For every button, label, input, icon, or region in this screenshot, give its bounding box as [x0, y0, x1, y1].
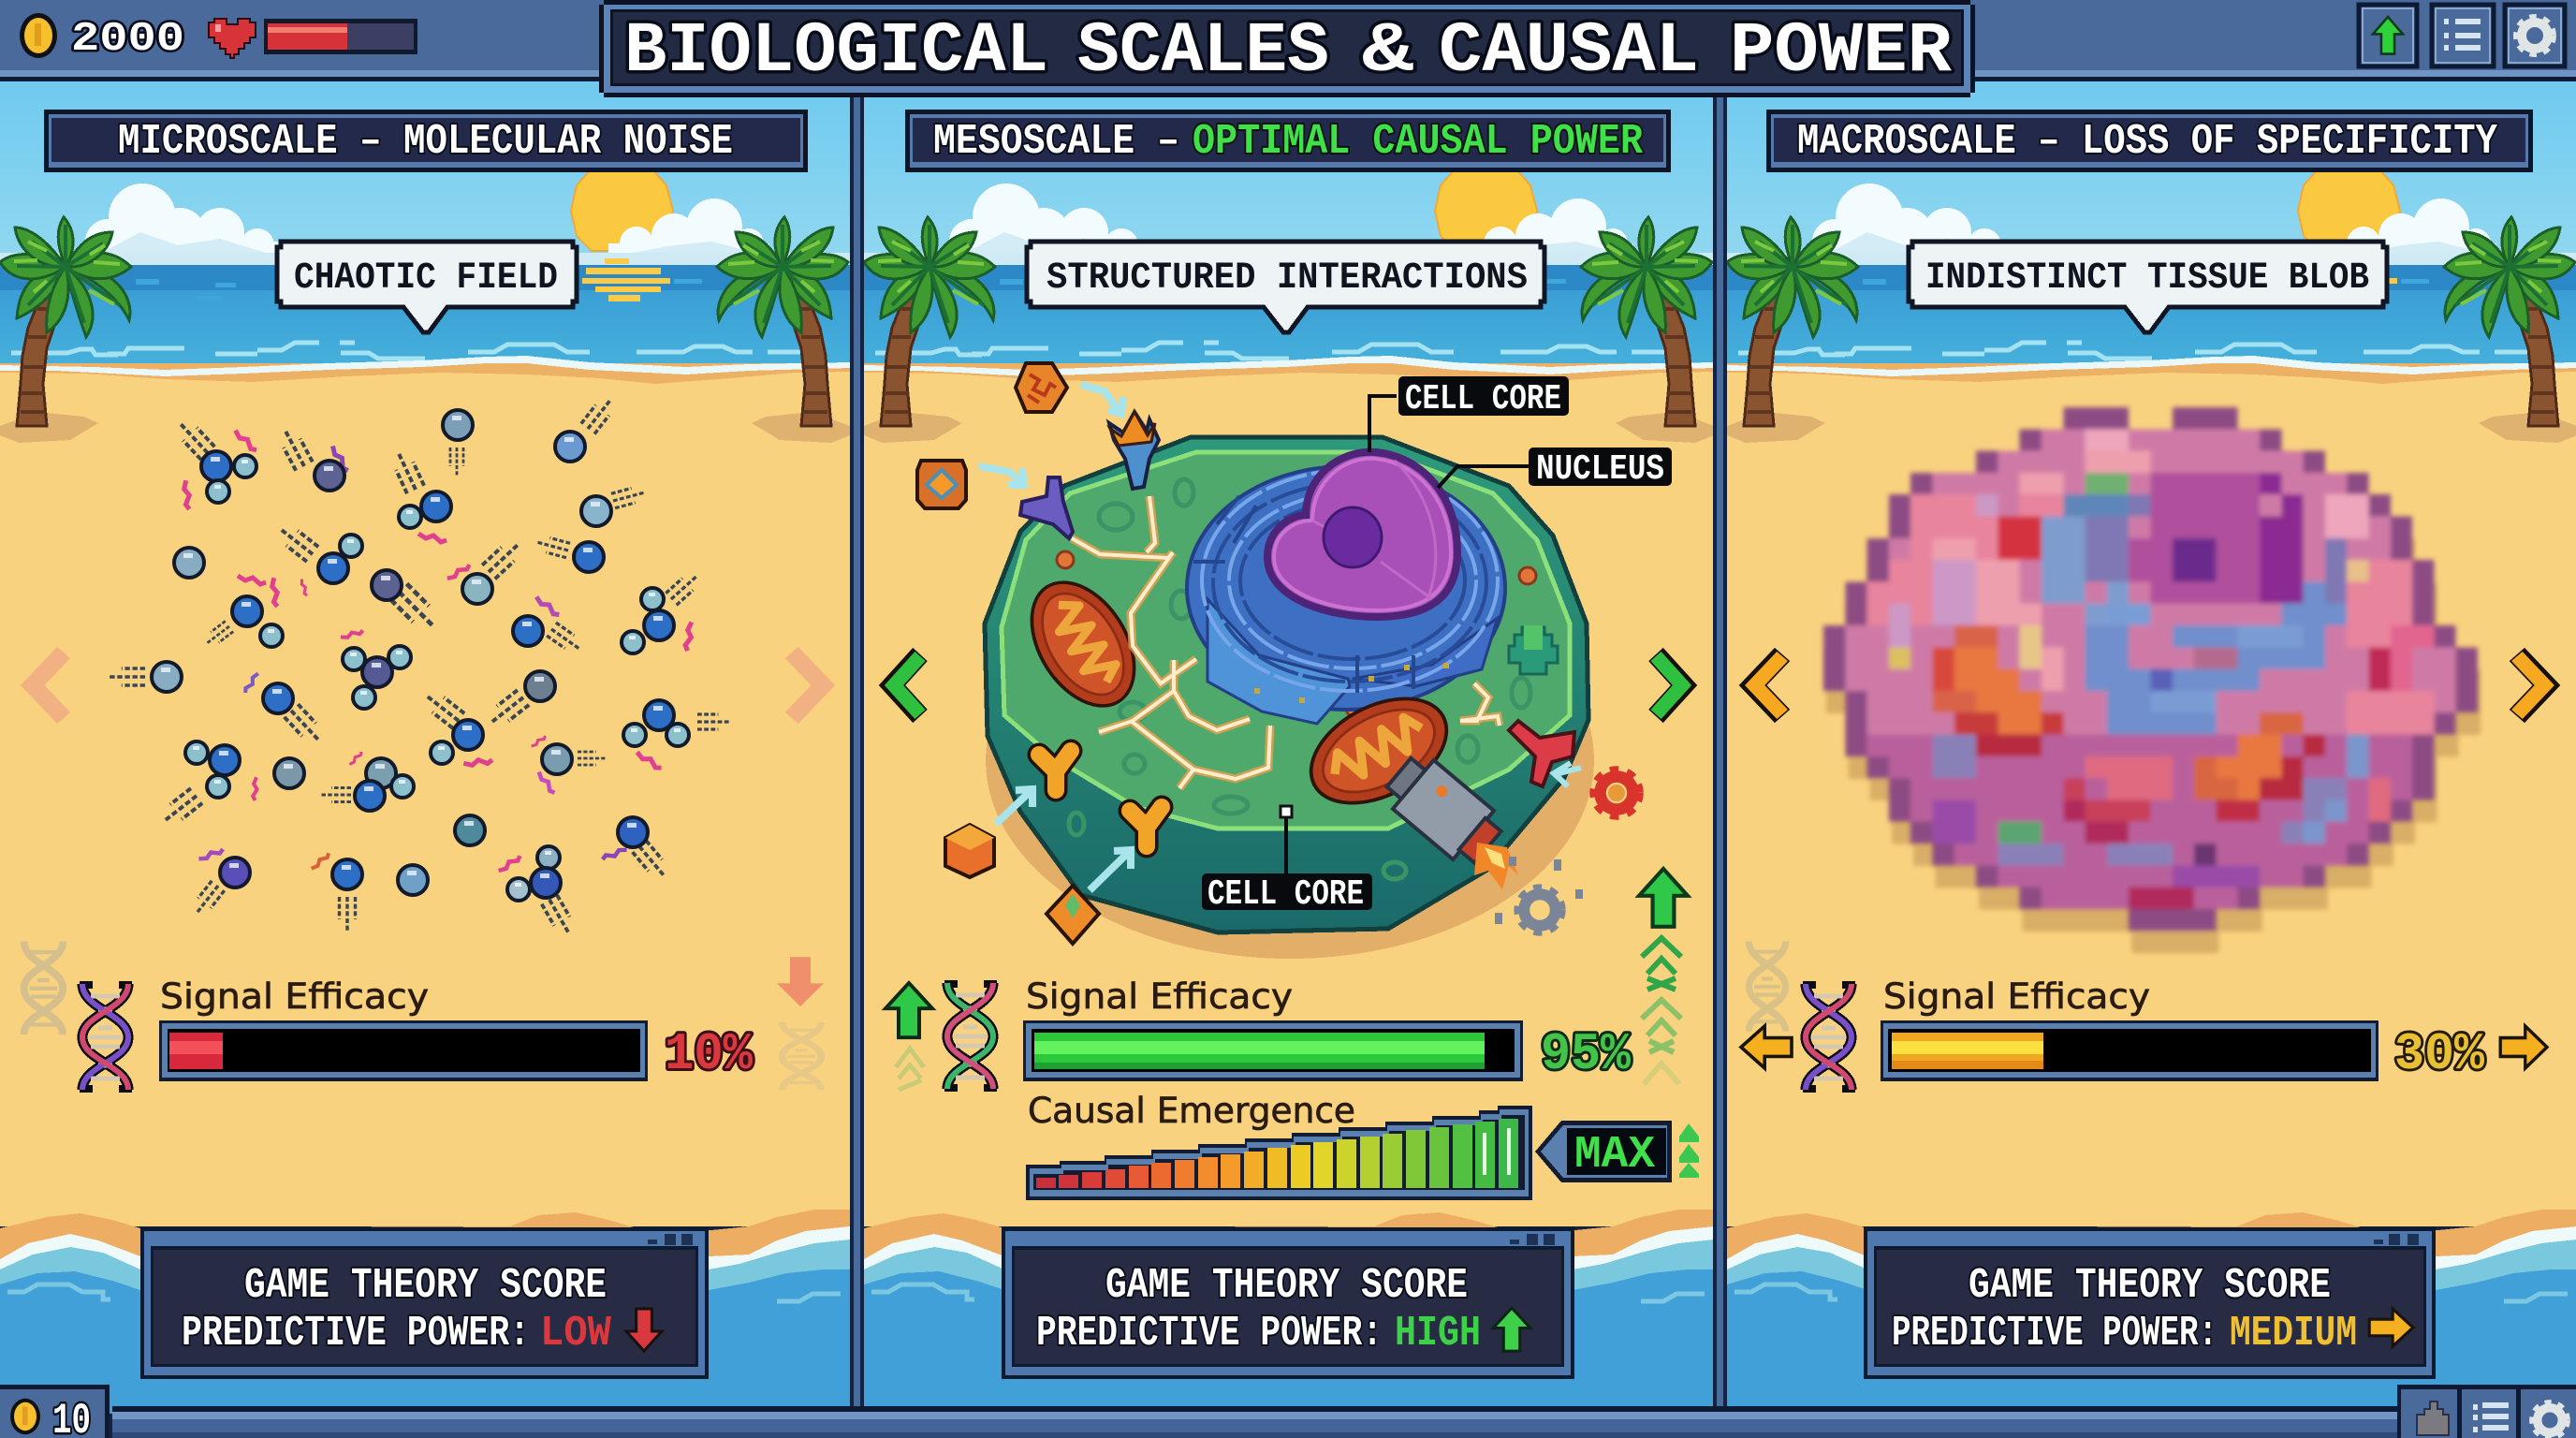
label: causal emergence: Causal Emergence [1028, 1091, 1355, 1131]
speech bubble: chaotic field [277, 242, 577, 332]
game theory score window: PREDICTIVE POWER: [1892, 1310, 2217, 1357]
speech bubble: structured interactions: STRUCTURED INTERACTIONS [1046, 257, 1528, 300]
cell shadow [986, 562, 1594, 959]
cell top face [1002, 452, 1570, 829]
game theory score window [1002, 1227, 1574, 1379]
cell body side [985, 437, 1588, 932]
interaction arrows [979, 385, 1581, 890]
label lines [1286, 396, 1529, 873]
game theory score window: GAME THEORY SCORE [1105, 1262, 1468, 1310]
left mitochondrion [1011, 564, 1155, 725]
top HUD bar [0, 0, 2576, 81]
game theory score window: GAME THEORY SCORE [1969, 1262, 2331, 1310]
icon: ghost dna [24, 942, 63, 1034]
badge: max [1535, 1121, 1672, 1182]
value: 10%: 10% [665, 1024, 753, 1084]
title [599, 0, 1975, 97]
icon: ghost dna [1749, 942, 1786, 1032]
icon: left chevron faded [33, 653, 64, 718]
icon: left chevron yellow [1753, 654, 1782, 716]
button: list menu [2432, 5, 2494, 66]
bottom status bar [112, 1406, 2397, 1438]
label: signal efficacy: Signal Efficacy [1026, 976, 1293, 1017]
label: cell core bottom: CELL CORE [1208, 874, 1364, 915]
heading: mesoscale: OPTIMAL CAUSAL POWER [1193, 118, 1643, 166]
molecules [152, 410, 689, 901]
cytoplasm vesicles [1069, 479, 1530, 879]
motor protein with flame [1379, 748, 1518, 889]
small organelles [1057, 551, 1536, 716]
icon: right chevron yellow [2517, 654, 2546, 716]
speech bubble: chaotic field: CHAOTIC FIELD [294, 257, 558, 300]
cell illustration [917, 363, 1672, 959]
label: cell core top: CELL CORE [1405, 379, 1561, 419]
icon: dna helix [1803, 984, 1855, 1090]
title: SCALES [1077, 11, 1329, 92]
golgi green organelle [1509, 625, 1558, 674]
icon: yellow arrow left [1741, 1026, 1792, 1068]
icon: ghost chevrons left [896, 1049, 924, 1090]
button: green up arrow [2359, 5, 2417, 66]
game theory score window: GAME THEORY SCORE [244, 1262, 607, 1310]
substrates [917, 363, 1639, 944]
panel: microscale background [0, 81, 850, 1414]
game theory score window: PREDICTIVE POWER: [182, 1310, 530, 1357]
heading: microscale: MICROSCALE – MOLECULAR NOISE [118, 118, 733, 166]
title: & [1362, 11, 1413, 92]
receptors on membrane [1020, 412, 1574, 846]
coin counter [20, 13, 184, 63]
health bar [264, 19, 417, 54]
icon: right chevron green [1656, 654, 1684, 716]
bottom-right button group [2397, 1385, 2576, 1438]
speech bubble: structured interactions [1027, 242, 1544, 332]
speech bubble: indistinct tissue blob [1909, 242, 2387, 332]
game theory score window: MEDIUM [2230, 1310, 2357, 1357]
game theory score window: HIGH [1395, 1310, 1481, 1357]
bottom-left coin counter [0, 1385, 110, 1438]
signal pathways [1072, 496, 1500, 788]
coin counter: 2000 [71, 16, 184, 63]
value: 95%: 95% [1541, 1024, 1631, 1084]
heading: microscale [44, 110, 808, 172]
molecule trails [108, 394, 730, 938]
endoplasmic reticulum [1187, 466, 1505, 724]
icon: heart [209, 19, 256, 58]
chart: causal emergence staircase [1026, 1106, 1532, 1200]
bar: signal efficacy 10% [159, 1020, 648, 1081]
speech bubble: indistinct tissue blob: INDISTINCT TISSUE BLOB [1925, 257, 2369, 300]
panel: microscale [24, 110, 824, 1379]
icon: dna helix [944, 983, 997, 1089]
icon: right chevron faded [792, 653, 823, 718]
title: CAUSAL [1439, 11, 1699, 92]
icon: up arrow left [886, 983, 932, 1037]
blob shadow [1826, 430, 2481, 953]
game theory score window: PREDICTIVE POWER: [1036, 1310, 1383, 1357]
icon: gear [2533, 1403, 2567, 1437]
panel: mesoscale [886, 110, 1699, 1379]
label: signal efficacy: Signal Efficacy [160, 976, 429, 1017]
badge: max: MAX [1574, 1130, 1655, 1181]
marker dot [1281, 806, 1292, 817]
title: POWER [1730, 11, 1952, 92]
icon: list [2473, 1402, 2509, 1432]
panel: macroscale background [1727, 81, 2576, 1414]
icon: small green chevrons [1679, 1123, 1699, 1178]
bar: signal efficacy 30% [1881, 1020, 2378, 1081]
heading: mesoscale [905, 110, 1671, 172]
panel: macroscale [1741, 110, 2547, 1379]
button: settings gear [2505, 5, 2565, 66]
icon: big up arrow right [1639, 869, 1688, 927]
title: BIOLOGICAL [624, 11, 1048, 92]
game theory score window [140, 1227, 709, 1379]
indistinct tissue blob [1823, 407, 2478, 931]
icon: left chevron green [892, 654, 920, 716]
icon: yellow arrow right [2500, 1026, 2547, 1068]
panel: mesoscale background [864, 81, 1714, 1414]
icon: character [2417, 1401, 2449, 1435]
molecular noise field [108, 394, 730, 938]
icon: ghost hourglass [783, 1022, 821, 1090]
icon: dna helix [80, 984, 132, 1090]
icon: ghost chevrons right [1642, 938, 1681, 1084]
icon: ghost down arrow [777, 957, 824, 1006]
game theory score window: LOW [540, 1310, 611, 1357]
nucleus [1267, 452, 1457, 617]
label: signal efficacy: Signal Efficacy [1883, 976, 2150, 1017]
bar: signal efficacy 95% [1023, 1020, 1523, 1081]
game theory score window [1864, 1227, 2436, 1379]
heading: mesoscale: MESOSCALE – [933, 118, 1179, 166]
right mitochondrion [1294, 677, 1464, 825]
value: 30%: 30% [2394, 1024, 2484, 1084]
label: nucleus: NUCLEUS [1536, 449, 1664, 490]
